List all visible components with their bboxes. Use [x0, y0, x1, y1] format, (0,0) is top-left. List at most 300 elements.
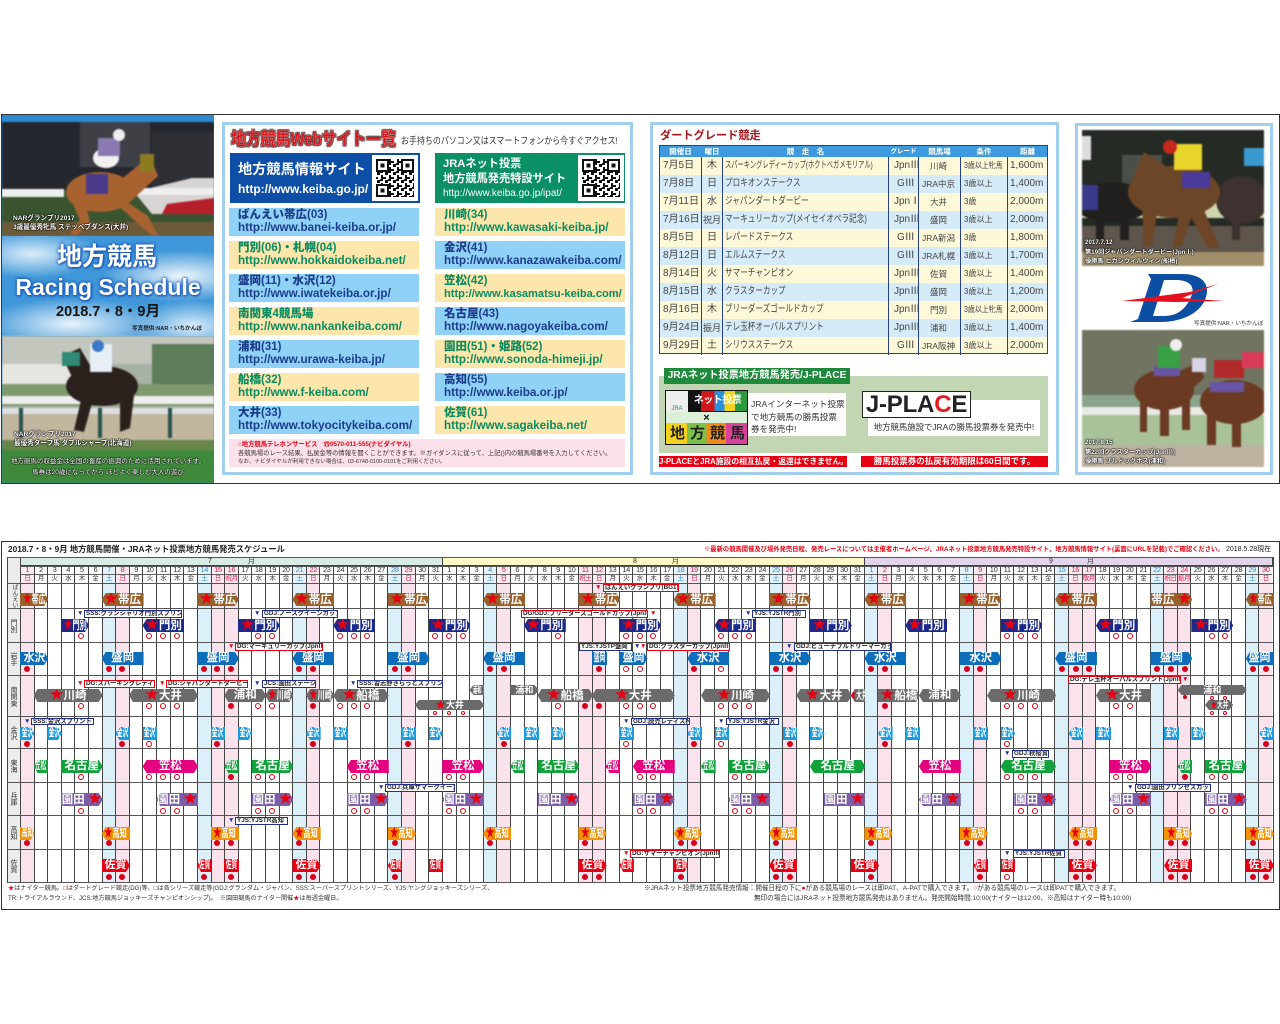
- row: Kanazawa: 金沢: [498, 727, 510, 739]
- table rows: 8/16: 木: [707, 304, 717, 315]
- row: Kanazawa: GDJ:読売レディス杯: [633, 718, 690, 725]
- table rows: 8/16: ブリーダーズゴールドカップ: [725, 304, 823, 315]
- site: sonoda: [435, 340, 625, 368]
- schedule date: 2018.5.28現在: [1226, 546, 1271, 553]
- site: saga: http://www.sagakeiba.net/: [444, 418, 587, 432]
- table rows: 9/24: 1,400m: [1010, 322, 1043, 333]
- subtitle: dates: 2018.7・8・9月: [56, 304, 160, 320]
- calendar columns: 火: [718, 575, 724, 582]
- table rows: 9/29: 2,000m: [1010, 340, 1043, 351]
- calendar columns: 月: [38, 575, 44, 582]
- table rows: 7/5: 川崎: [930, 161, 947, 171]
- calendar columns: 月: [419, 575, 425, 582]
- site: kasamatsu: 笠松(42): [444, 275, 487, 287]
- row: Saga: 佐賀: [226, 859, 237, 871]
- caption: Japan Dirt Derby: [1084, 238, 1194, 266]
- row: Hyogo: ▼: [1127, 784, 1133, 791]
- row: Kanazawa: 金沢: [784, 727, 796, 739]
- row label: Saga: 佐賀: [10, 859, 17, 873]
- calendar columns: 木: [650, 575, 656, 582]
- site: monbetsu: http://www.hokkaidokeiba.net/: [238, 254, 406, 266]
- calendar columns: 水: [541, 575, 548, 582]
- row: Saga: 佐賀: [1249, 859, 1271, 871]
- row: Tokai: 名古屋: [1209, 760, 1243, 772]
- calendar columns: 月: [991, 575, 997, 582]
- table rows: 7/16: 祝月: [703, 215, 721, 225]
- row: Saga: 佐賀: [675, 859, 687, 871]
- calendar columns: 水: [1018, 575, 1024, 582]
- row: Saga: 佐賀: [582, 859, 603, 871]
- icon: QR code 1: [372, 155, 418, 201]
- site: banei: [229, 208, 419, 236]
- table rows: 8/15: 3歳以上: [964, 287, 992, 296]
- site: morioka: http://www.iwatekeiba.or.jp/: [238, 286, 391, 300]
- row: Kanazawa: 金沢: [308, 727, 319, 739]
- table rows: 9/29: 3歳以上: [964, 341, 992, 350]
- logo: net voting x local racing: JRA: [671, 406, 683, 412]
- calendar columns: 土: [678, 575, 684, 582]
- row: Iwate: 水沢: [697, 652, 720, 664]
- table rows: 8/16: 2,000m: [1010, 304, 1043, 315]
- calendar columns: 日: [882, 575, 888, 582]
- table header: グレード: [890, 148, 916, 155]
- site: kawasaki: 川崎(34): [444, 209, 487, 221]
- month header: September: [864, 557, 1273, 566]
- calendar columns: 火: [433, 575, 439, 582]
- site box: JRA net voting: http://www.keiba.go.jp/ipat/: [443, 188, 562, 199]
- table rows: 8/12: 1,700m: [1010, 250, 1043, 261]
- calendar columns: 木: [1127, 575, 1133, 582]
- table rows: 7/16: [660, 211, 1047, 229]
- table rows: 9/24: テレ玉杯オーバルスプリント: [725, 322, 824, 333]
- row: Iwate: 水沢: [779, 652, 802, 664]
- row: Kanazawa: 金沢: [117, 727, 128, 739]
- row: Tokai: [34, 750, 1247, 780]
- calendar columns: 木: [460, 575, 466, 582]
- table rows: 8/14: 1,400m: [1010, 268, 1043, 279]
- panel: dirt grade: [650, 122, 1059, 475]
- calendar columns: 水: [1208, 575, 1214, 582]
- caption: Japan Dirt Derby: 2017.7.12: [1085, 239, 1113, 246]
- calendar columns: 日: [215, 575, 221, 582]
- text panel: J-PLACE: [868, 400, 1040, 436]
- table rows: 7/5: 木: [707, 160, 717, 171]
- caption: Cluster Cup: [1084, 438, 1176, 466]
- row: Kanazawa: 金沢: [1070, 727, 1082, 739]
- row: Minami Kanto: ▼: [1182, 676, 1188, 683]
- row: Kanazawa: 金沢: [335, 727, 346, 739]
- row: Iwate: 盛岡: [1065, 652, 1088, 664]
- month header: August: 8: [633, 558, 637, 565]
- calendar columns: 木: [364, 575, 371, 582]
- site: oi: http://www.tokyocitykeiba.com/: [238, 418, 412, 432]
- logo: J-PLACE: J-PLACE: [866, 391, 967, 418]
- table: dirt grade races: [659, 145, 1048, 354]
- row: Saga: ▼: [1004, 850, 1010, 857]
- table rows: 7/8: 日: [707, 178, 717, 189]
- table rows: 7/8: プロキオンステークス: [725, 178, 801, 189]
- row: Saga: 佐賀: [854, 859, 876, 871]
- row: Kanazawa: 金沢: [525, 727, 537, 739]
- legend: left: [8, 884, 493, 902]
- row: Saga: 佐賀: [621, 859, 632, 871]
- row: Monbetsu: ▼: [650, 610, 656, 617]
- warning bar right: 勝馬投票券の払戻有効期限は60日間です。: [874, 456, 1035, 466]
- row: Kanazawa: 金沢: [1261, 727, 1272, 739]
- panel: web sites: [222, 122, 633, 475]
- site: sonoda: http://www.sonoda-himeji.jp/: [444, 352, 603, 366]
- row: Iwate: YJS:YJSTP盛岡: [581, 643, 628, 650]
- legend: right: 無印の場合にはJRAネット投票地方競馬発売はありません。発売開始時間:10:00(ナイターは12:00、※高知はナイター時も10:00): [754, 895, 1131, 902]
- row: Kanazawa: 金沢: [1166, 727, 1177, 739]
- calendar columns: 日: [310, 575, 316, 582]
- table rows: 7/8: [660, 175, 1047, 193]
- site: saga: [435, 406, 625, 434]
- calendar columns: 土: [1249, 575, 1255, 582]
- site: kochi: 高知(55): [444, 374, 487, 386]
- row: Minami Kanto: JCS:園田ステージ: [264, 680, 316, 687]
- calendar columns: 火: [1099, 575, 1106, 582]
- calendar columns: 土: [201, 575, 207, 582]
- calendar columns: 敬月: [1083, 575, 1095, 582]
- row: Tokai: 名古屋: [1011, 760, 1046, 772]
- calendar columns: 金: [1140, 575, 1146, 582]
- calendar columns: 月: [133, 575, 139, 582]
- calendar columns: 水: [637, 575, 643, 582]
- logo: net voting x local racing: [665, 390, 748, 445]
- row: Kanazawa: ▼: [718, 718, 724, 725]
- calendar columns: 月: [705, 575, 711, 582]
- row: Kanazawa: 金沢: [907, 727, 918, 739]
- table rows: 9/29: [660, 337, 1047, 353]
- calendar columns: 金: [759, 575, 765, 582]
- row: Tokai: 笠松: [226, 760, 237, 772]
- table rows: 7/11: ジャパンダートダービー: [725, 196, 809, 207]
- heading: J-PLACE: [664, 368, 850, 384]
- row: Tokai: 笠松: [703, 760, 714, 772]
- logo: dirt grade D: [1122, 274, 1224, 322]
- row: Hyogo: ▼: [378, 784, 384, 791]
- calendar columns: 日: [1263, 575, 1269, 582]
- site: funabashi: [229, 373, 419, 401]
- site: kanazawa: 金沢(41): [444, 242, 487, 254]
- text panel: J-PLACE: 地方競馬施設でJRAの勝馬投票券を発売中!: [874, 422, 1034, 432]
- row: Tokai: 名古屋: [732, 760, 766, 772]
- site: minami kanto: [229, 307, 419, 335]
- calendar columns: 祝月: [225, 575, 238, 582]
- calendar columns: 月: [324, 575, 330, 582]
- site: banei: http://www.banei-keiba.or.jp/: [238, 220, 396, 234]
- table rows: 8/15: 盛岡: [930, 287, 947, 297]
- calendar columns: 火: [147, 575, 153, 582]
- calendar columns: 日: [405, 575, 411, 582]
- row: Minami Kanto: 浦和: [234, 689, 257, 701]
- calendar columns: 水: [1113, 575, 1119, 582]
- calendar columns: 火: [51, 575, 58, 582]
- site: saga: 佐賀(61): [444, 407, 487, 419]
- row: Tokai: 笠松: [159, 760, 182, 772]
- table rows: 8/12: 日: [707, 250, 717, 261]
- calendar columns: 水: [65, 575, 71, 582]
- row: Iwate: ▼: [228, 643, 234, 650]
- calendar columns: 土: [487, 575, 493, 582]
- site: kawasaki: [435, 208, 625, 236]
- row: Kanazawa: 金沢: [1193, 727, 1204, 739]
- calendar columns: 木: [746, 575, 752, 582]
- row: Tokai: 笠松: [452, 760, 475, 772]
- calendar columns: 水: [732, 575, 738, 582]
- row: Saga: 佐賀: [1002, 859, 1014, 871]
- calendar columns: 振月: [1178, 575, 1190, 582]
- calendar columns: 火: [623, 575, 629, 582]
- calendar columns: 祝日: [1164, 575, 1177, 582]
- calendar columns: 月: [514, 575, 520, 582]
- cover footer note: 地方競馬の収益金は全国の畜産の振興のために活用されています。: [11, 458, 205, 465]
- row: Tokai: 名古屋: [255, 760, 290, 772]
- table rows: 9/29: GⅢ: [897, 340, 915, 351]
- table rows: 7/11: 水: [707, 196, 717, 207]
- schedule title: 2018.7・8・9月 地方競馬開催・JRAネット投票地方競馬発売スケジュール: [8, 544, 285, 554]
- heading: J-PLACE: JRAネット投票地方競馬発売/J-PLACE: [668, 370, 846, 381]
- row: Monbetsu: ▼: [254, 610, 260, 617]
- calendar columns: 金: [473, 575, 479, 582]
- legend: right: ※JRAネット投票地方競馬発売情報：開催日程の下に●がある競馬場のレースは即PAT、A-PATで購入できます。○がある競馬場のレースは即PATで購入できます。: [644, 885, 1120, 892]
- table rows: 7/11: [660, 193, 1047, 211]
- row: Tokai: 名古屋: [65, 760, 99, 772]
- table rows: 8/5: 3歳: [964, 233, 976, 242]
- row: Minami Kanto: ▼: [159, 680, 165, 687]
- row label: Kochi: 高知: [10, 826, 17, 840]
- table rows: 8/14: 佐賀: [930, 269, 947, 279]
- caption: Japan Dirt Derby: 優勝馬 ヒガシウィルウィン(船橋): [1085, 258, 1177, 265]
- subheading: お手持ちのパソコン又はスマートフォンから今すぐアクセス!: [401, 135, 618, 146]
- legend: left: ★はナイター競馬。□はダートグレード競走(DG)等、□は各シリーズ競走等(GDJ:グランダム・ジャパン、SSS:スーパースプリントシリーズ、YJS:ヤングジョッキーズシリーズ、: [8, 885, 493, 892]
- row: Saga: 佐賀: [296, 859, 317, 871]
- table rows: 8/14: 8月14日: [663, 268, 700, 279]
- site: nagoya: [435, 307, 625, 335]
- table rows: 8/16: 8月16日: [663, 304, 700, 315]
- cover photo: day race: [2, 335, 214, 483]
- site: oi: 大井(33): [238, 407, 281, 419]
- table rows: 7/5: スパーキングレディーカップ(ホクトベガメモリアル): [725, 160, 873, 171]
- calendar columns: 火: [909, 575, 915, 582]
- row: Minami Kanto: [34, 676, 1247, 715]
- table rows: 7/16: 7月16日: [663, 214, 700, 225]
- table rows: 7/11: 大井: [930, 197, 947, 207]
- table rows: 8/15: 1,200m: [1010, 286, 1043, 297]
- calendar columns: 火: [337, 575, 343, 582]
- table rows: 8/14: [660, 265, 1047, 283]
- row: Tokai: ▼: [1004, 750, 1010, 757]
- cover photo: night race: [2, 121, 214, 236]
- table header: 競 走 名: [787, 147, 824, 156]
- row: Iwate: ▼: [786, 643, 792, 650]
- row: Iwate: ▼: [634, 643, 640, 650]
- row: Saga: YJS:YJSTR佐賀: [1015, 850, 1062, 857]
- row: Kanazawa: 金沢: [880, 727, 891, 739]
- site: morioka: 盛岡(11)・水沢(12): [238, 275, 336, 287]
- row: Monbetsu: [61, 610, 1233, 639]
- caption: Cluster Cup: 優勝馬 ブルドッグボス(浦和): [1085, 458, 1165, 465]
- row: Kanazawa: 金沢: [621, 727, 632, 739]
- site: kanazawa: [435, 241, 625, 269]
- photo: Japan Dirt Derby: [1081, 129, 1265, 267]
- table rows: 8/16: 門別: [930, 305, 947, 315]
- row: Kanazawa: 金沢: [403, 727, 414, 739]
- row: Kanazawa: 金沢: [212, 727, 224, 739]
- calendar columns: 月: [609, 575, 616, 582]
- photo credit: 写真提供:NAR・いちかんぼ: [132, 326, 202, 332]
- panel: schedule frame: [1, 541, 1280, 910]
- calendar columns: 水: [160, 575, 166, 582]
- calendar columns: 木: [936, 575, 942, 582]
- calendar columns: 金: [664, 575, 670, 582]
- calendar columns: 火: [1195, 575, 1201, 582]
- calendar columns: 金: [569, 575, 575, 582]
- cover caption 1: [12, 213, 129, 232]
- row: Monbetsu: ▼: [745, 610, 751, 617]
- row: Saga: DG:サマーチャンピオン(JpnⅢ): [632, 850, 720, 857]
- calendar columns: 土: [868, 575, 874, 582]
- table rows: 8/5: GⅢ: [897, 232, 915, 243]
- site: minami kanto: 南関東4競馬場: [238, 308, 313, 320]
- site: monbetsu: 門別(06)・札幌(04): [238, 242, 336, 254]
- caption: Japan Dirt Derby: 第19回ジャパンダートダービー(JpnⅠ): [1085, 248, 1194, 256]
- site: monbetsu: [229, 241, 419, 269]
- site: nagoya: http://www.nagoyakeiba.com/: [444, 320, 608, 332]
- calendar columns: 水: [351, 575, 357, 582]
- calendar columns: 木: [555, 575, 561, 582]
- table rows: 8/15: クラスターカップ: [725, 286, 786, 297]
- table rows: 7/5: [660, 157, 1047, 175]
- table rows: 8/5: 1,800m: [1010, 232, 1043, 243]
- site box: NAR info: [230, 153, 420, 203]
- table rows: 7/8: 3歳以上: [964, 179, 992, 188]
- calendar columns: 木: [174, 575, 180, 582]
- site: kochi: http://www.keiba.or.jp/: [444, 386, 568, 398]
- table rows: 7/8: 7月8日: [663, 178, 694, 189]
- row: Kochi: YJS:YJSTR高知: [237, 817, 284, 824]
- heading: web sites: 地方競馬Webサイト一覧: [231, 129, 396, 149]
- row: Kochi: [20, 817, 1274, 846]
- calendar columns: 水: [922, 575, 929, 582]
- table rows: 9/24: 振月: [703, 323, 721, 333]
- row label: Minami Kanto: 南関東: [10, 686, 17, 706]
- calendar columns: 金: [92, 575, 98, 582]
- logo: net voting x local racing: ネット投票: [694, 395, 741, 406]
- cover caption 1: NARグランプリ2017: [13, 215, 75, 222]
- row: Tokai: 笠松: [1119, 760, 1142, 772]
- calendar columns: 土: [392, 575, 398, 582]
- cover footer note: [10, 456, 205, 476]
- table rows: 7/11: 7月11日: [663, 196, 699, 207]
- row: Iwate: 盛岡: [492, 652, 516, 664]
- calendar columns: 金: [1045, 575, 1051, 582]
- calendar columns: 木: [1222, 575, 1228, 582]
- calendar columns: 日: [24, 575, 30, 582]
- site box: JRA net voting: 地方競馬発売特設サイト: [443, 173, 566, 185]
- row: Iwate: 水沢: [23, 652, 45, 664]
- row label: Iwate: 岩手: [10, 652, 17, 666]
- row: Tokai: 笠松: [35, 760, 47, 772]
- row: Banei Obihiro: [20, 584, 1274, 606]
- row: Hyogo: [61, 784, 1247, 814]
- row: Kanazawa: 金沢: [975, 727, 986, 739]
- calendar columns: 木: [79, 575, 85, 582]
- row: Tokai: GDJ:秋桜賞: [1014, 750, 1048, 757]
- calendar columns: 日: [786, 575, 792, 582]
- telephone service note: 各競馬場のレース結果、払戻金等の情報を聞くことができます。※ガイダンスに従って、上記()内の競馬場番号を入力してください。: [238, 450, 611, 456]
- calendar columns: 水: [256, 575, 262, 582]
- site: kanazawa: http://www.kanazawakeiba.com/: [444, 254, 622, 266]
- calendar columns: 金: [1235, 575, 1242, 582]
- calendar columns: 月: [895, 575, 901, 582]
- table rows: 8/12: [660, 247, 1047, 265]
- site: urawa: http://www.urawa-keiba.jp/: [238, 352, 385, 366]
- calendar columns: [20, 566, 1272, 882]
- month header: August: [442, 557, 865, 566]
- site: nagoya: 名古屋(43): [444, 308, 499, 320]
- row: Kanazawa: YJS:YJSTR金沢: [728, 718, 775, 725]
- calendar columns: 木: [269, 575, 275, 582]
- table header: 曜日: [704, 147, 720, 156]
- outer frame: top spread: [1, 114, 1280, 484]
- row: Tokai: 笠松: [928, 760, 951, 772]
- row: Tokai: 笠松: [512, 760, 523, 772]
- row: Saga: 佐賀: [430, 859, 442, 871]
- month header: August: 月: [672, 558, 679, 565]
- calendar columns: 土: [1059, 575, 1065, 582]
- table rows: 7/11: JpnⅠ: [894, 196, 920, 207]
- month header: September: 月: [1087, 558, 1094, 565]
- row label: Tokai: 東海: [10, 758, 17, 772]
- site box: JRA net voting: [435, 153, 625, 203]
- calendar columns: 金: [854, 575, 861, 582]
- calendar columns: 金: [283, 575, 289, 582]
- table header: [660, 146, 1047, 157]
- row: Iwate: ▼: [640, 643, 646, 650]
- row: Saga: 佐賀: [1072, 859, 1094, 871]
- calendar columns: 火: [1004, 575, 1010, 582]
- table rows: 8/5: レパードステークス: [725, 232, 793, 243]
- month header: July: [20, 557, 443, 566]
- table rows: 7/8: 1,400m: [1010, 178, 1043, 189]
- site: urawa: [229, 340, 419, 368]
- photo: Cluster Cup: [1081, 329, 1265, 468]
- site: kochi: [435, 373, 625, 401]
- text panel: JRA internet: [748, 393, 846, 436]
- calendar columns: 土: [773, 575, 779, 582]
- site: kasamatsu: http://www.kasamatsu-keiba.com/: [444, 288, 622, 300]
- month header: September: 9: [1049, 558, 1053, 565]
- cover caption 2: [13, 429, 132, 448]
- table rows: 8/15: 8月15日: [663, 286, 700, 297]
- row label: Hyogo: 兵庫: [10, 792, 17, 806]
- row: Kanazawa: 金沢: [812, 727, 823, 739]
- row: Monbetsu: ▼: [77, 610, 83, 617]
- row: Iwate: 盛岡: [1249, 652, 1271, 664]
- row: Kanazawa: [20, 718, 1274, 747]
- site: banei: ばんえい帯広(03): [238, 209, 327, 221]
- text panel: JRA internet: JRAインターネット投票: [751, 399, 845, 409]
- row: Kanazawa: 金沢: [553, 727, 564, 739]
- calendar columns: 火: [528, 575, 534, 582]
- table rows: 8/12: エルムステークス: [725, 250, 785, 261]
- row: Tokai: 笠松: [642, 760, 665, 772]
- schedule note: ※最新の競馬開催及び場外発売日程、発売レースについては主催者ホームページ、JRAネット投票地方競馬発売特設サイト、地方競馬情報サイト(裏面にURLを記載)でご確認ください。: [704, 546, 1224, 553]
- calendar columns: 木: [841, 575, 847, 582]
- table rows: 7/5: 3歳以上牝馬: [964, 161, 1003, 170]
